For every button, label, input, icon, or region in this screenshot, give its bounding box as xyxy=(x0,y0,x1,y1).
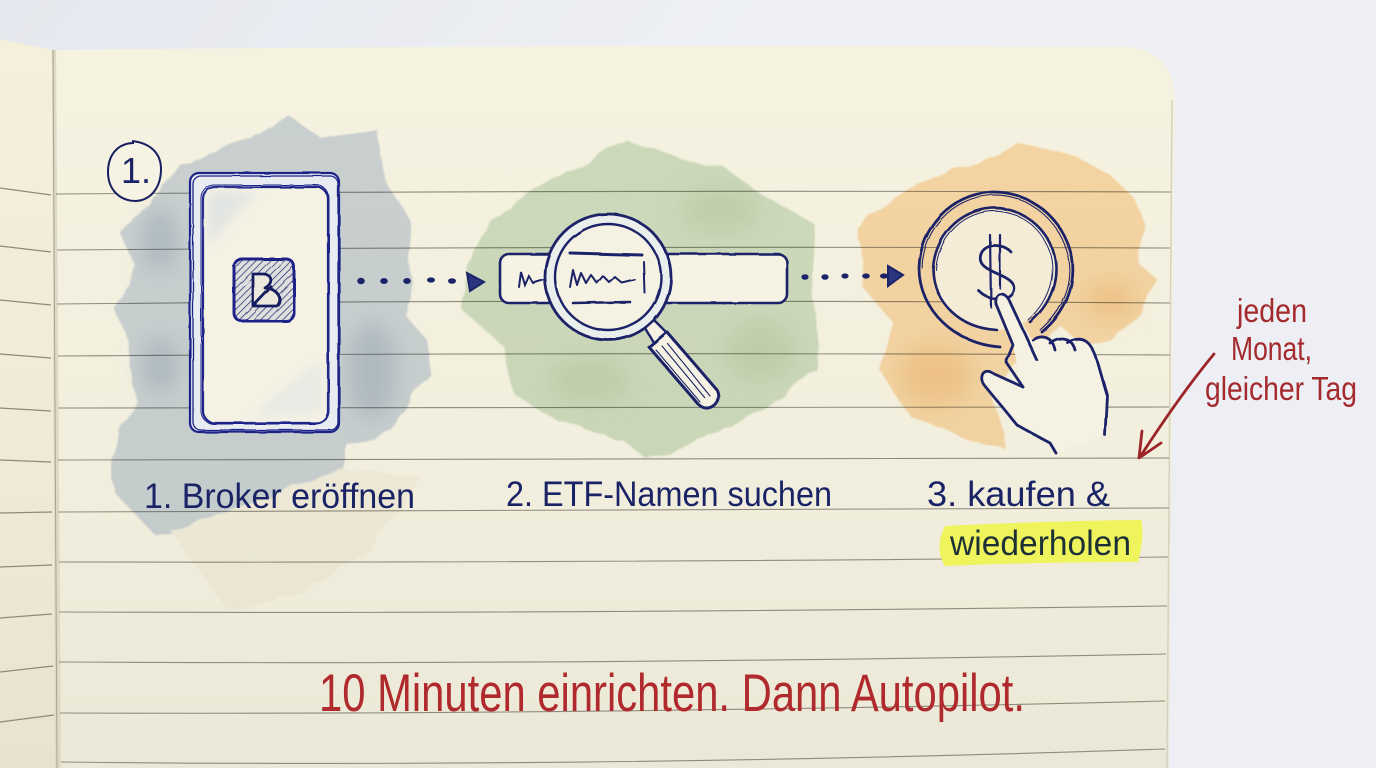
watercolor wash: green xyxy=(462,140,817,460)
orange wash shading xyxy=(899,282,1134,405)
arrow: step 2 to step 3 xyxy=(801,266,903,286)
step number badge xyxy=(108,141,161,201)
left notebook page xyxy=(0,39,56,768)
icon: smartphone xyxy=(190,173,339,432)
icon: search bar xyxy=(500,254,787,303)
closing headline: 10 Minuten einrichten. Dann Autopilot. xyxy=(319,664,1025,723)
blue wash shading xyxy=(142,208,396,418)
side note: monthly repeat xyxy=(1205,292,1357,407)
side note: monthly repeat: Monat, xyxy=(1231,330,1312,367)
icon: pointing hand xyxy=(982,294,1107,453)
label: step 3: 3. kaufen & xyxy=(927,475,1110,514)
highlighted word: wiederholen: wiederholen xyxy=(949,524,1131,563)
icon: magnifying glass xyxy=(545,214,718,408)
right notebook page xyxy=(52,46,1175,768)
label: step 2: 2. ETF-Namen suchen xyxy=(506,475,832,514)
arrow: side note to step 3 xyxy=(1139,354,1214,458)
arrow: step 1 to step 2 xyxy=(357,273,484,291)
icon: broker app B xyxy=(234,259,294,321)
icon: dollar coin xyxy=(919,192,1073,347)
label: step 1: 1. Broker eröffnen xyxy=(144,477,415,516)
watercolor wash: blue xyxy=(110,117,430,612)
green wash shading xyxy=(550,188,794,402)
side note: monthly repeat: jeden xyxy=(1236,292,1307,329)
watercolor wash: orange xyxy=(860,143,1158,450)
step number badge: 1. xyxy=(121,150,151,191)
